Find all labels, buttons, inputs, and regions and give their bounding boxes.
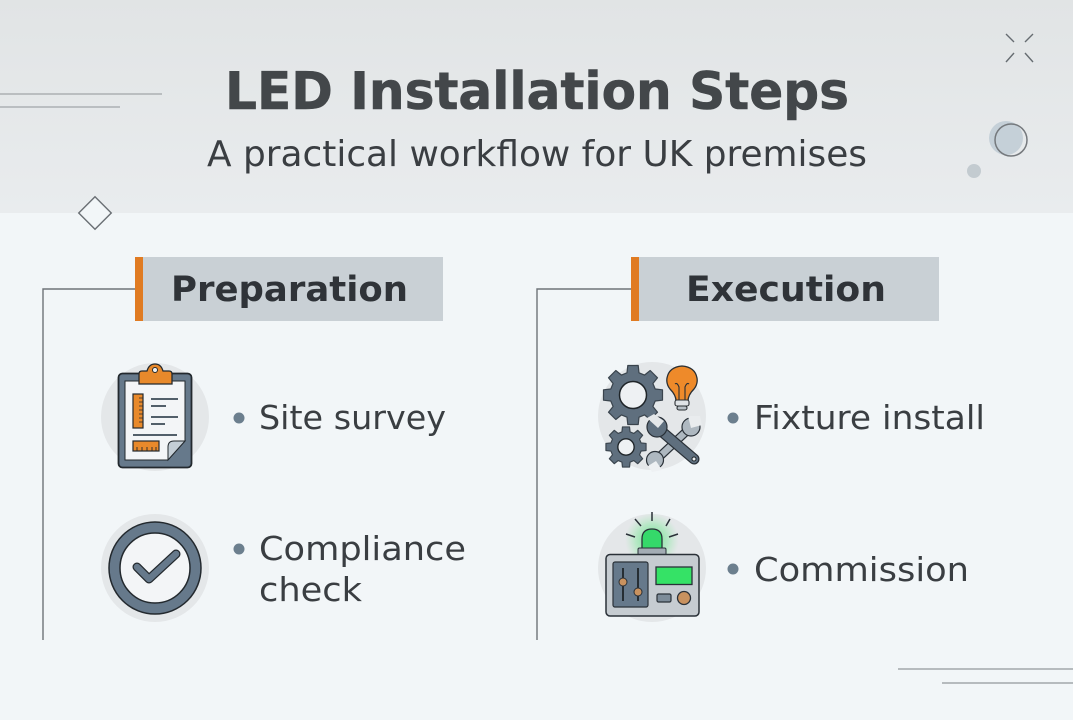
- text: site survey: Site survey: [259, 398, 446, 437]
- icon: compliance check: [101, 514, 209, 622]
- decoration: diamond: [79, 197, 111, 229]
- subtitle: A practical workflow for UK premises: [207, 134, 867, 175]
- heading: preparation: Preparation: [171, 270, 408, 310]
- decoration: sparkle: [1006, 34, 1033, 62]
- heading: preparation: [135, 257, 443, 321]
- bullet: fixture install: [728, 412, 738, 424]
- icon: commissioning console: [598, 512, 706, 622]
- text: commission: Commission: [754, 550, 969, 589]
- icon: clipboard: [101, 363, 209, 471]
- title: LED Installation Steps: [225, 62, 849, 122]
- bullet: commission: [728, 564, 738, 574]
- text: fixture install: Fixture install: [754, 398, 985, 437]
- decoration: bottom lines: [898, 669, 1073, 683]
- text: compliance check: Compliance: [259, 529, 466, 568]
- icon: gears, bulb and wrenches: [598, 362, 706, 472]
- header band: [0, 0, 1073, 213]
- decoration: circles: [967, 121, 1027, 178]
- panel: execution: [537, 257, 985, 640]
- heading: execution: [631, 257, 939, 321]
- heading: execution: Execution: [686, 270, 886, 310]
- bullet: compliance check: [234, 544, 244, 554]
- panel: preparation: [43, 257, 466, 640]
- text: compliance check: check: [259, 570, 363, 609]
- bullet: site survey: [234, 412, 244, 424]
